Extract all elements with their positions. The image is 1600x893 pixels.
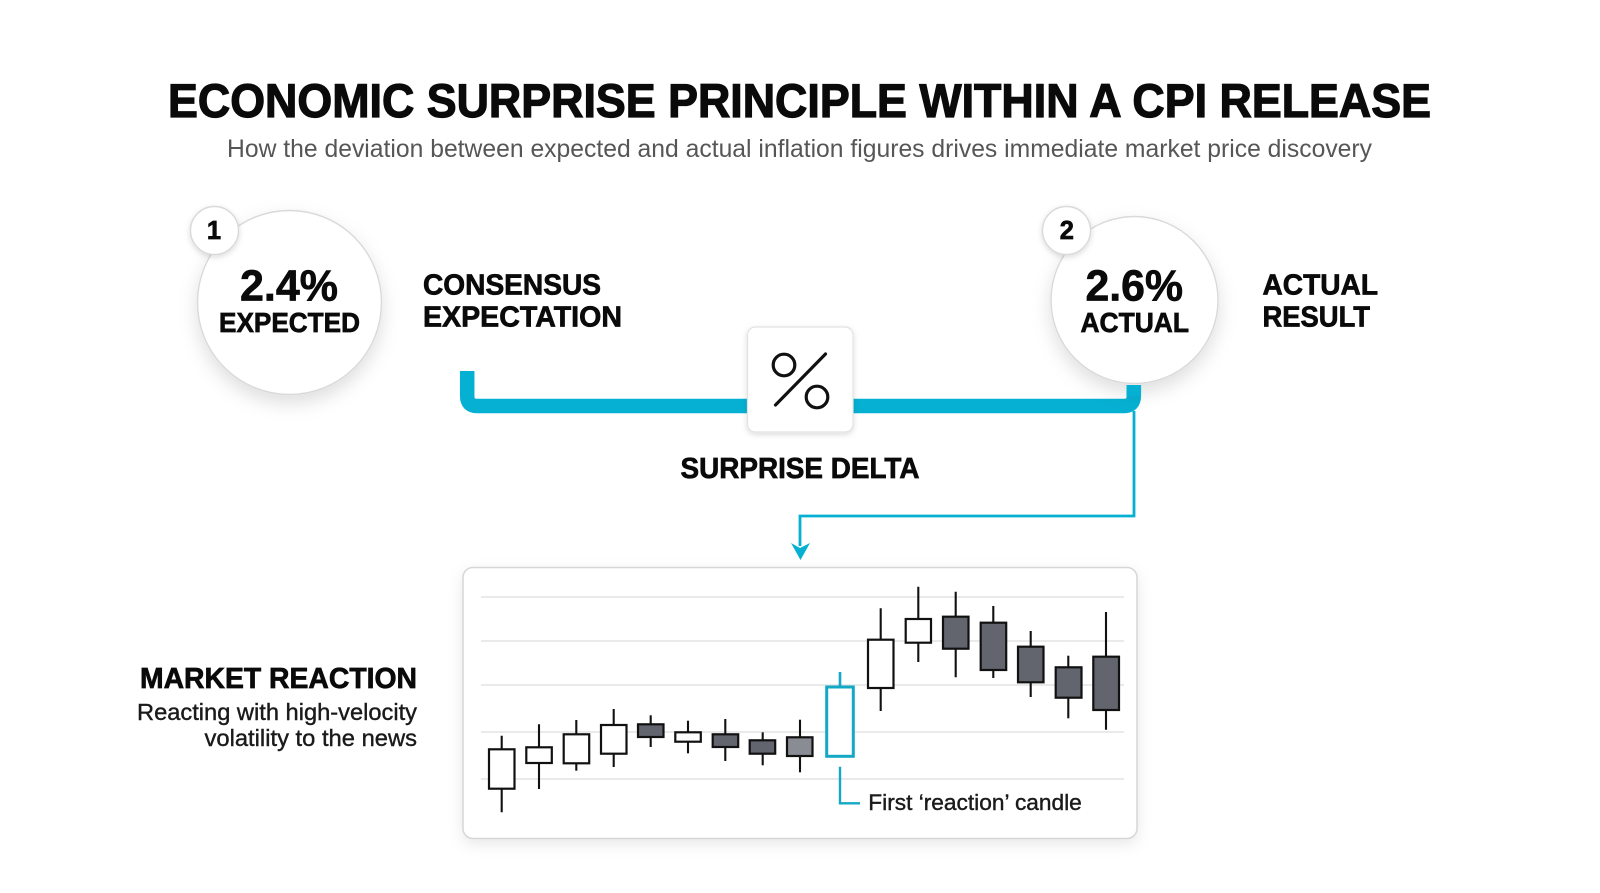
panel: actual circle	[1042, 206, 1218, 384]
callout: first reaction candle	[840, 767, 1082, 815]
callout: first reaction candle: First ‘reaction’ candle	[868, 790, 1082, 815]
text: market reaction description: Reacting with high-velocity	[137, 699, 417, 725]
panel: expected circle	[190, 206, 382, 394]
label: surprise delta: SURPRISE DELTA	[680, 453, 920, 485]
arrow: delta to market reaction	[791, 411, 1134, 560]
badge 2	[1042, 206, 1090, 254]
circle	[1051, 216, 1218, 384]
heading: actual result	[1262, 270, 1378, 334]
heading: consensus expectation: EXPECTATION	[423, 302, 622, 334]
candles: pre-release	[489, 709, 812, 812]
heading: consensus expectation: CONSENSUS	[423, 270, 601, 302]
candles: post-release	[868, 587, 1119, 730]
badge 1	[190, 206, 238, 254]
text: market reaction description: volatility to the news	[204, 725, 417, 751]
panel: candlestick chart	[463, 568, 1137, 838]
circle	[198, 210, 382, 394]
badge 2: 2	[1060, 217, 1074, 245]
title: ECONOMIC SURPRISE PRINCIPLE WITHIN A CPI RELEASE	[168, 74, 1431, 127]
heading: actual result: RESULT	[1262, 302, 1370, 334]
label actual: ACTUAL	[1080, 307, 1189, 338]
subtitle: How the deviation between expected and actual inflation figures drives immediate market price discovery	[227, 135, 1372, 163]
text: market reaction description	[137, 699, 417, 751]
candle: first reaction	[827, 672, 853, 756]
value 2.4%: 2.4%	[240, 262, 338, 310]
heading: actual result: ACTUAL	[1262, 270, 1378, 302]
heading: consensus expectation	[423, 270, 622, 334]
connector: bracket between expected and actual	[467, 371, 1134, 406]
bracket end over circle	[1127, 385, 1141, 396]
badge 1: 1	[207, 217, 221, 245]
icon: percent box	[748, 327, 853, 432]
value 2.6%: 2.6%	[1086, 262, 1183, 310]
heading: market reaction: MARKET REACTION	[140, 663, 417, 695]
label expected: EXPECTED	[219, 307, 360, 338]
